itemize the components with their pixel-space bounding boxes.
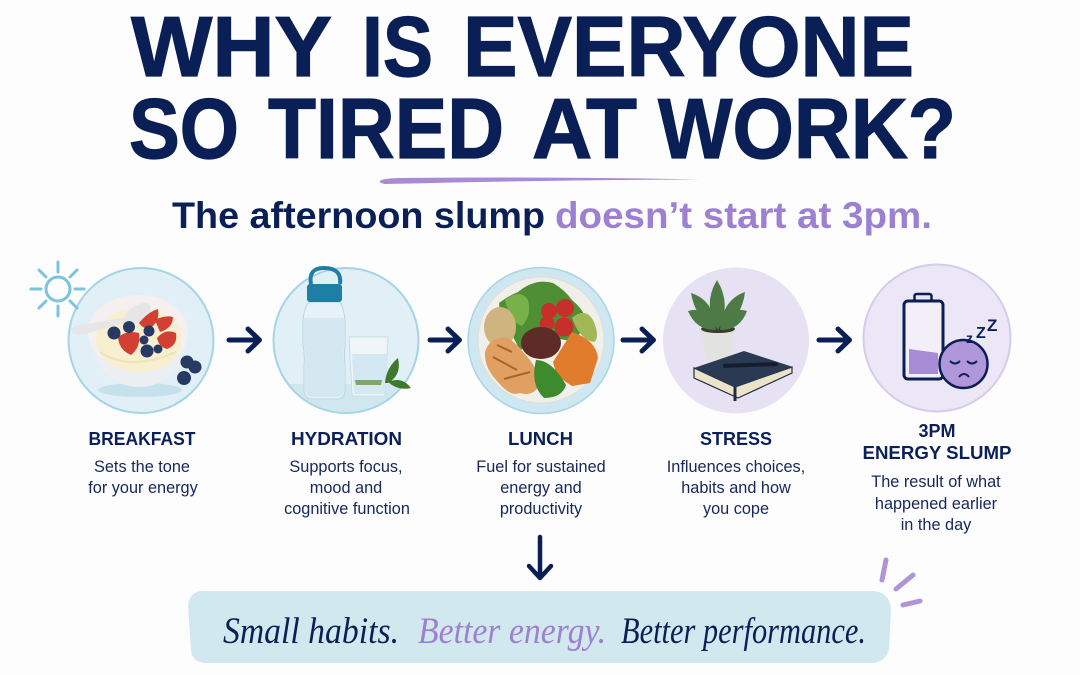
label: breakfast: BREAKFAST bbox=[88, 429, 196, 449]
banner text: Small habits. bbox=[223, 611, 399, 652]
label: lunch: LUNCH bbox=[508, 429, 573, 449]
circle: breakfast bbox=[68, 268, 214, 413]
text: lunch: energy and bbox=[500, 479, 582, 497]
icon: water glass bbox=[349, 337, 411, 396]
text: hydration: Supports focus, bbox=[289, 458, 403, 476]
icon: notebook bbox=[694, 351, 793, 401]
step: hydration bbox=[274, 268, 418, 518]
circle: slump bbox=[864, 264, 1010, 412]
icon: sleepy face: Z bbox=[987, 316, 997, 335]
text: stress: Influences choices, bbox=[667, 458, 805, 476]
sparkle accent bbox=[882, 560, 920, 605]
title: SO bbox=[129, 82, 239, 177]
banner text: Better energy. bbox=[418, 611, 606, 652]
circle: lunch bbox=[468, 268, 614, 414]
circle: stress bbox=[663, 268, 809, 414]
label: slump bbox=[862, 421, 1012, 463]
title: IS bbox=[362, 0, 433, 95]
text: breakfast: for your energy bbox=[88, 479, 199, 497]
icon: sleepy face: Z bbox=[976, 325, 986, 342]
icon: battery bbox=[904, 294, 943, 379]
subtitle: doesn’t start at 3pm. bbox=[555, 194, 932, 236]
circle: hydration bbox=[274, 268, 418, 413]
icon: sun bbox=[31, 262, 84, 316]
label: slump: 3PM bbox=[918, 421, 956, 441]
subtitle: The afternoon slump bbox=[172, 194, 545, 236]
icon: sleepy face: z bbox=[966, 330, 973, 346]
icon: food bowl bbox=[478, 277, 604, 403]
text: lunch: productivity bbox=[500, 500, 583, 518]
ground tint bbox=[290, 384, 402, 412]
text: stress bbox=[667, 458, 805, 518]
text: hydration: mood and bbox=[310, 479, 382, 497]
text: lunch: Fuel for sustained bbox=[476, 458, 606, 476]
step: 3pm energy slump bbox=[862, 264, 1012, 534]
step: lunch bbox=[468, 268, 614, 518]
text: hydration: cognitive function bbox=[284, 500, 410, 518]
step: breakfast bbox=[31, 262, 214, 497]
text: slump: The result of what bbox=[871, 473, 1001, 491]
arrow bbox=[623, 329, 654, 351]
icon: sleepy face bbox=[940, 316, 997, 388]
arrow bbox=[229, 329, 260, 351]
title: AT bbox=[532, 82, 637, 177]
title: EVERYONE bbox=[463, 0, 914, 95]
text: stress: habits and how bbox=[681, 479, 791, 497]
text: slump bbox=[871, 473, 1001, 534]
text: slump: in the day bbox=[901, 516, 972, 534]
spoon bbox=[71, 303, 151, 334]
arrow down bbox=[529, 537, 551, 578]
arrow bbox=[430, 329, 460, 351]
text: stress: you cope bbox=[703, 500, 769, 518]
subtitle bbox=[172, 194, 932, 236]
banner text bbox=[223, 611, 866, 652]
icon: yogurt bowl bbox=[71, 295, 202, 397]
banner bbox=[188, 591, 891, 663]
text: slump: happened earlier bbox=[875, 495, 998, 513]
text: breakfast: Sets the tone bbox=[94, 458, 190, 476]
title: WORK? bbox=[658, 82, 956, 177]
text: lunch bbox=[476, 458, 606, 518]
text: hydration bbox=[284, 458, 410, 518]
banner text: Better performance. bbox=[621, 611, 866, 652]
text: breakfast bbox=[88, 458, 199, 497]
label: hydration: HYDRATION bbox=[291, 429, 402, 449]
step: stress bbox=[663, 268, 809, 518]
arrow bbox=[819, 329, 850, 351]
title: TIRED bbox=[268, 82, 504, 177]
icon: water bottle bbox=[303, 268, 345, 399]
icon: plant bbox=[688, 280, 747, 362]
title: WHY bbox=[131, 0, 332, 95]
title underline bbox=[380, 178, 700, 184]
label: slump: ENERGY SLUMP bbox=[862, 443, 1012, 463]
title bbox=[129, 0, 956, 177]
label: stress: STRESS bbox=[700, 429, 772, 449]
